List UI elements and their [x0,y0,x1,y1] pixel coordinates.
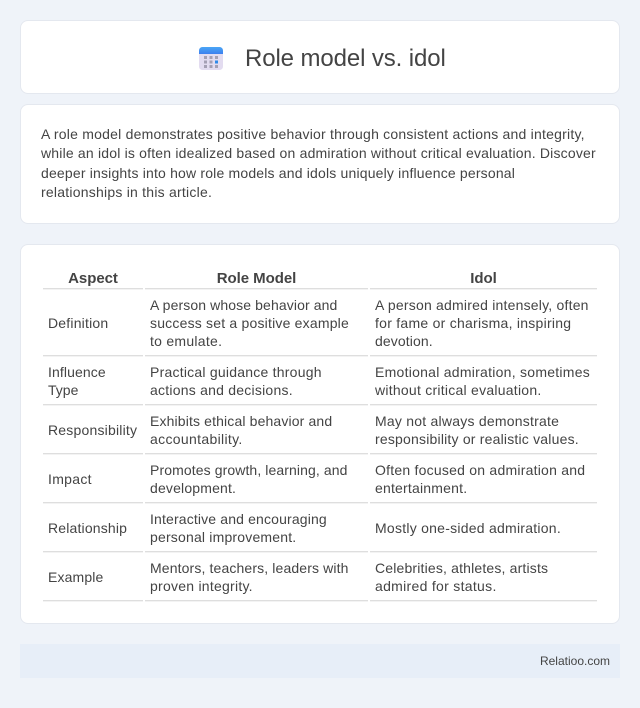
row: example: admired for status. [375,578,497,594]
row: responsibility: May not always demonstrate [375,413,559,429]
intro paragraph: relationships in this article. [41,184,212,200]
row: definition: to emulate. [150,333,222,349]
row: responsibility: accountability. [150,431,243,447]
footer bar [20,644,620,678]
row: relationship: Interactive and encouraging [150,511,327,527]
row: example: Celebrities, athletes, artists [375,560,548,576]
panel: intro text card [20,104,620,224]
footer credit: Relatioo.com [540,654,610,668]
intro paragraph [41,126,596,200]
row: example [48,560,548,594]
panel: title card [20,20,620,94]
row: impact: Promotes growth, learning, and [150,462,348,478]
row: influence type [48,364,590,398]
row: definition [48,297,589,349]
row: example: proven integrity. [150,578,253,594]
row: definition: A person whose behavior and [150,297,337,313]
row: impact [48,462,585,496]
row: relationship: Mostly one-sided admiration. [375,520,561,536]
row: influence type: actions and decisions. [150,382,293,398]
row: influence type: Influence [48,364,106,380]
intro paragraph: A role model demonstrates positive behavior through consistent actions and integrity, [41,126,585,142]
row: impact: Impact [48,471,92,487]
column headings: Role Model [217,270,296,287]
row: example: Example [48,569,103,585]
intro paragraph: deeper insights into how role models and idols uniquely influence personal [41,165,515,181]
row: influence type: Type [48,382,78,398]
row: relationship: personal improvement. [150,529,296,545]
row: definition: success set a positive example [150,315,349,331]
row: influence type: Practical guidance through [150,364,322,380]
icon: calendar [199,47,223,70]
row: example: Mentors, teachers, leaders with [150,560,349,576]
row: relationship [48,511,561,545]
row: responsibility: Exhibits ethical behavior and [150,413,332,429]
row: definition: A person admired intensely, often [375,297,589,313]
row: impact: entertainment. [375,480,467,496]
column headings: Aspect [68,270,118,287]
column headings [68,270,497,287]
row: relationship: Relationship [48,520,127,536]
row: definition: devotion. [375,333,433,349]
intro paragraph: while an idol is often idealized based on admiration without critical evaluation. Discover [41,145,596,161]
row: influence type: Emotional admiration, sometimes [375,364,590,380]
row: influence type: without critical evaluation. [375,382,542,398]
row: responsibility [48,413,579,447]
column headings: Idol [470,270,497,287]
panel: comparison table card [20,244,620,624]
row: definition: for fame or charisma, inspiring [375,315,571,331]
row: impact: Often focused on admiration and [375,462,585,478]
row: responsibility: Responsibility [48,422,137,438]
row: impact: development. [150,480,236,496]
row: responsibility: responsibility or realistic values. [375,431,579,447]
row: definition: Definition [48,315,108,331]
title: Role model vs. idol [245,45,446,72]
